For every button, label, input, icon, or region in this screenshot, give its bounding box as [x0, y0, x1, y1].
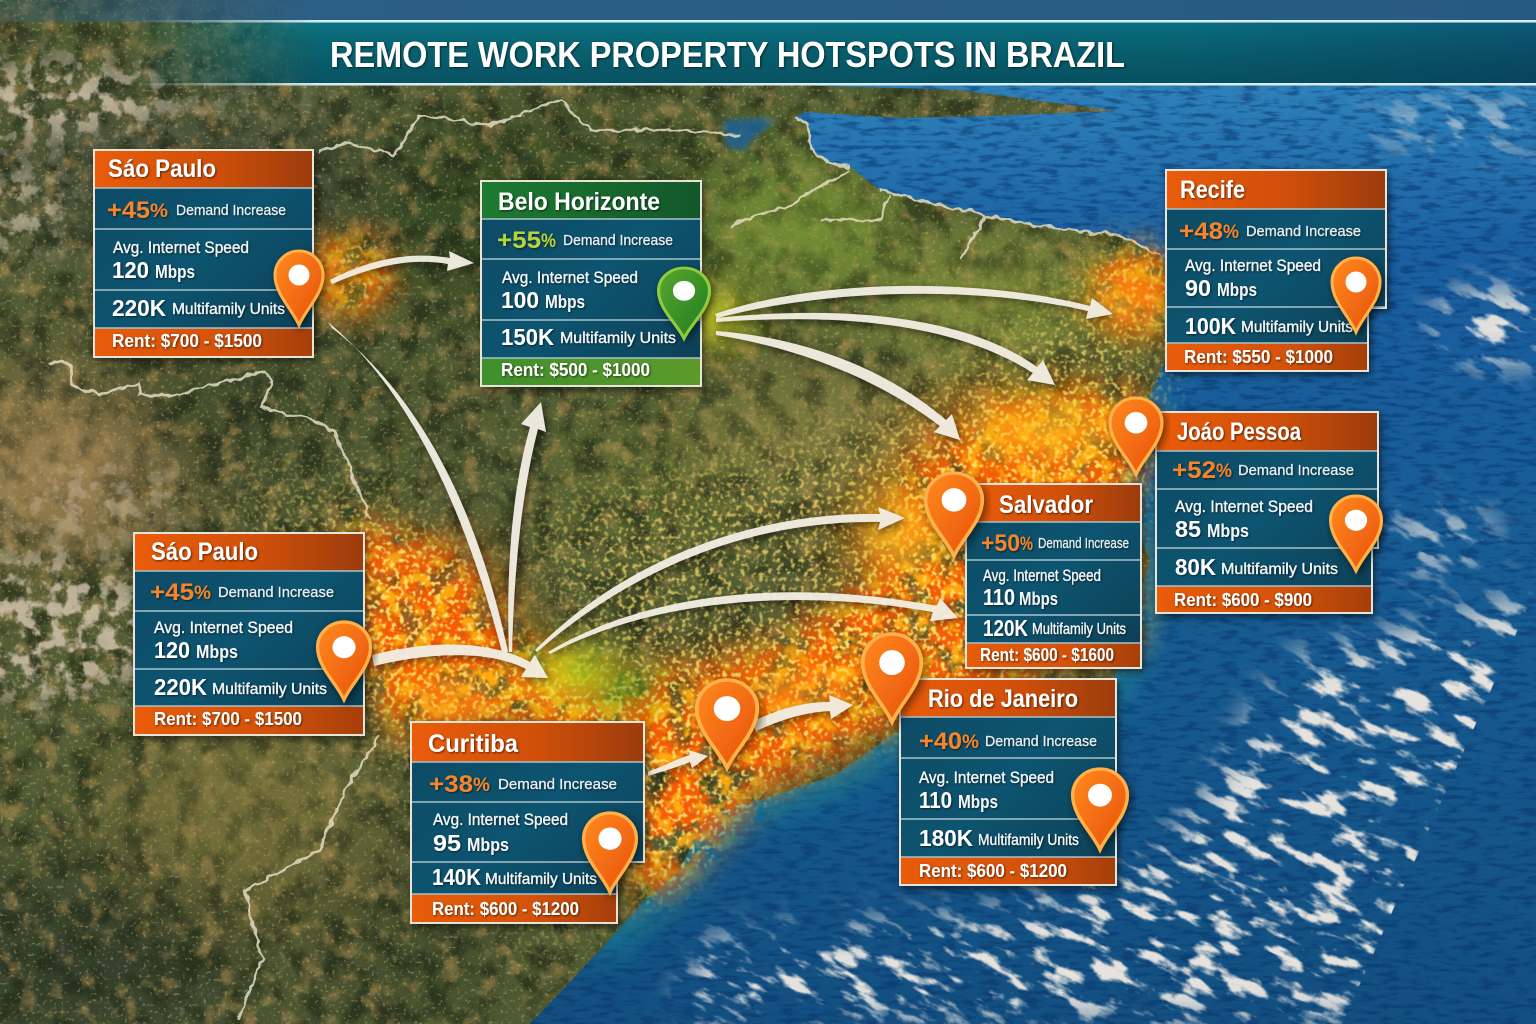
- north coast inlet: [724, 118, 775, 150]
- internet speed: 110: [919, 787, 952, 813]
- panel: Salvador: [966, 484, 1141, 668]
- internet speed: 120: [112, 257, 149, 283]
- multifamily units: [501, 324, 676, 350]
- multifamily units: 120K: [983, 615, 1028, 641]
- panel: Rio de Janeiro: [900, 679, 1116, 885]
- icon: pin Curitiba inner: [584, 813, 636, 892]
- multifamily units: [432, 864, 597, 890]
- internet speed: 90: [1185, 275, 1211, 301]
- multifamily units: [1185, 313, 1353, 339]
- internet speed: 120: [154, 637, 190, 663]
- internet speed: Mbps: [958, 792, 998, 812]
- icon: pin Rio de Janeiro outer: [863, 634, 921, 722]
- city name: Rio de Janeiro: [928, 685, 1078, 713]
- icon: pin São Paulo lower: [318, 622, 370, 700]
- demand increase: Demand Increase: [985, 733, 1097, 750]
- demand increase: [150, 579, 334, 606]
- demand increase: Demand Increase: [1246, 223, 1361, 240]
- demand increase: [1179, 218, 1361, 245]
- multifamily units: Multifamily Units: [1241, 319, 1353, 336]
- title: REMOTE WORK PROPERTY HOTSPOTS IN BRAZIL: [330, 34, 1125, 75]
- icon: pin João Pessoa inner: [1331, 496, 1381, 571]
- multifamily units: Multifamily Units: [560, 330, 676, 347]
- internet speed: Avg. Internet Speed: [919, 768, 1054, 787]
- internet speed: Mbps: [467, 835, 509, 855]
- internet speed: 85: [1175, 516, 1201, 542]
- multifamily units: Multifamily Units: [485, 871, 597, 888]
- internet speed: [433, 810, 568, 856]
- multifamily units: Multifamily Units: [1221, 561, 1338, 578]
- multifamily units: Multifamily Units: [212, 681, 327, 698]
- icon: pin Recife: [1332, 258, 1380, 332]
- demand increase: +48: [1179, 218, 1223, 245]
- demand increase: %: [150, 201, 168, 222]
- rent range: Rent: $700 - $1500: [154, 709, 302, 729]
- internet speed: 110: [983, 584, 1015, 610]
- internet speed: [983, 566, 1101, 610]
- multifamily units: Multifamily Units: [172, 301, 285, 318]
- rent range: Rent: $600 - $1200: [919, 861, 1067, 881]
- city name: Sáo Paulo: [108, 155, 216, 183]
- internet speed: [501, 268, 638, 313]
- internet speed: Avg. Internet Speed: [1185, 256, 1321, 275]
- multifamily units: [112, 295, 285, 321]
- multifamily units: Multifamily Units: [978, 832, 1079, 849]
- demand increase: %: [473, 775, 490, 796]
- demand increase: %: [541, 231, 556, 252]
- internet speed: 100: [501, 287, 539, 313]
- icon: pin São Paulo upper: [275, 251, 323, 325]
- multifamily units: 220K: [112, 295, 166, 321]
- internet speed: Avg. Internet Speed: [983, 566, 1101, 585]
- city name: Joáo Pessoa: [1177, 418, 1302, 446]
- demand increase: Demand Increase: [1238, 462, 1354, 479]
- multifamily units: Multifamily Units: [1032, 621, 1126, 638]
- rent range: Rent: $500 - $1000: [501, 360, 650, 380]
- rent range: Rent: $550 - $1000: [1184, 347, 1333, 367]
- top haze behind banner: [0, 0, 1536, 22]
- multifamily units: [154, 674, 327, 700]
- internet speed: Mbps: [155, 262, 195, 282]
- internet speed: Mbps: [196, 642, 238, 662]
- internet speed: Mbps: [1207, 521, 1249, 541]
- panel: João Pessoa: [1156, 412, 1378, 613]
- demand increase: %: [1020, 534, 1033, 555]
- demand increase: +50: [981, 530, 1020, 557]
- demand increase: [1172, 457, 1354, 484]
- internet speed: 95: [433, 830, 461, 856]
- icon: pin Salvador: [926, 473, 982, 556]
- rent range: Rent: $700 - $1500: [112, 331, 262, 351]
- demand increase: +52: [1172, 457, 1216, 484]
- rent range: Rent: $600 - $900: [1174, 590, 1312, 610]
- multifamily units: 140K: [432, 864, 481, 890]
- demand increase: %: [1216, 461, 1232, 482]
- internet speed: Mbps: [1019, 589, 1058, 609]
- background: land mass of Brazil: [0, 0, 1165, 1024]
- demand increase: [497, 227, 673, 254]
- title banner: [130, 20, 1536, 86]
- demand increase: Demand Increase: [1038, 535, 1129, 552]
- panel: São Paulo (upper): [94, 150, 313, 357]
- panel: Recife: [1166, 170, 1386, 371]
- demand increase: +40: [919, 728, 962, 755]
- internet speed: Mbps: [1217, 280, 1257, 300]
- panel: Belo Horizonte: [481, 181, 701, 386]
- clouds over ocean: [658, 86, 1536, 1024]
- demand increase: Demand Increase: [498, 776, 617, 793]
- internet speed: Avg. Internet Speed: [154, 618, 293, 637]
- city name: Salvador: [999, 491, 1093, 519]
- internet speed: [112, 238, 249, 283]
- icon: pin João Pessoa top: [1110, 398, 1162, 474]
- internet speed: Mbps: [545, 292, 585, 312]
- demand increase: +55: [497, 227, 541, 254]
- panel: Curitiba: [411, 722, 644, 923]
- demand increase: %: [194, 583, 211, 604]
- multifamily units: 220K: [154, 674, 207, 700]
- city light glow along the coast: [188, 212, 1194, 976]
- rent range: Rent: $600 - $1200: [432, 899, 579, 919]
- multifamily units: 180K: [919, 825, 973, 851]
- demand increase: Demand Increase: [218, 584, 334, 601]
- city name: Belo Horizonte: [498, 188, 660, 216]
- demand increase: [107, 197, 286, 224]
- internet speed: Avg. Internet Speed: [1175, 497, 1313, 516]
- multifamily units: 80K: [1175, 554, 1216, 580]
- multifamily units: [919, 825, 1079, 851]
- internet speed: [1185, 256, 1321, 301]
- demand increase: +38: [429, 771, 473, 798]
- demand increase: Demand Increase: [176, 202, 286, 219]
- city name: Recife: [1180, 176, 1245, 204]
- multifamily units: [1175, 554, 1338, 580]
- city name: Sáo Paulo: [151, 538, 258, 566]
- internet speed: Avg. Internet Speed: [113, 238, 249, 257]
- internet speed: [919, 768, 1054, 813]
- rent range: Rent: $600 - $1600: [980, 645, 1114, 665]
- flow arrows: [328, 251, 1113, 776]
- icon: pin Rio de Janeiro inner: [1073, 769, 1127, 850]
- demand increase: [429, 771, 617, 798]
- icon: pin Curitiba outer: [697, 680, 757, 768]
- multifamily units: [983, 615, 1126, 641]
- multifamily units: 150K: [501, 324, 554, 350]
- internet speed: Avg. Internet Speed: [502, 268, 638, 287]
- city name: Curitiba: [428, 730, 519, 758]
- internet speed: [1175, 497, 1313, 542]
- demand increase: %: [962, 732, 979, 753]
- panel: São Paulo (lower): [134, 533, 364, 735]
- demand increase: [919, 728, 1097, 755]
- multifamily units: 100K: [1185, 313, 1236, 339]
- demand increase: +45: [107, 197, 150, 224]
- demand increase: Demand Increase: [563, 232, 673, 249]
- demand increase: +45: [150, 579, 194, 606]
- icon: pin Belo Horizonte (green): [659, 268, 709, 338]
- internet speed: [154, 618, 293, 663]
- internet speed: Avg. Internet Speed: [433, 810, 568, 829]
- demand increase: %: [1223, 222, 1239, 243]
- state borders and bright coastline: [50, 100, 1160, 1018]
- demand increase: [981, 530, 1129, 557]
